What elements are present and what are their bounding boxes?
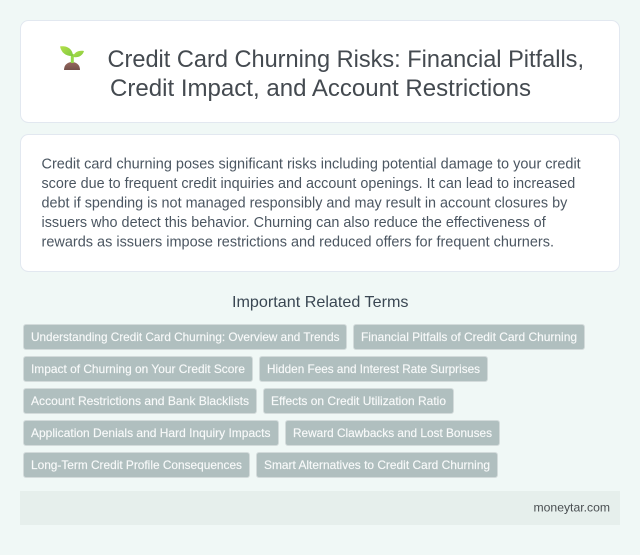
tag: financial pitfalls: Financial Pitfalls of Credit Card Churning <box>361 330 577 344</box>
tag: utilization: Effects on Credit Utilization Ratio <box>271 394 446 408</box>
description text: Credit card churning poses significant risks including potential damage to your credit <box>42 156 581 172</box>
tag: restrictions: Account Restrictions and Bank Blacklists <box>31 394 249 408</box>
tag list <box>24 324 584 478</box>
tag: financial pitfalls <box>354 324 584 350</box>
title: Credit Impact, and Account Restrictions <box>110 76 531 102</box>
footer source: moneytar.com <box>534 501 610 515</box>
title: Credit Card Churning Risks: Financial Pitfalls, <box>108 47 584 73</box>
tag: credit score: Impact of Churning on Your Credit Score <box>31 362 245 376</box>
tag: restrictions <box>24 388 256 414</box>
tag: long-term: Long-Term Credit Profile Consequences <box>31 458 242 472</box>
title <box>108 47 584 102</box>
tag: denials: Application Denials and Hard Inquiry Impacts <box>31 426 270 440</box>
footer <box>20 491 620 525</box>
tag: long-term <box>24 452 250 478</box>
description text: rewards as issuers impose restrictions and reduced offers for frequent churners. <box>42 234 554 250</box>
tag: clawbacks: Reward Clawbacks and Lost Bonuses <box>293 426 492 440</box>
tag: alternatives: Smart Alternatives to Credit Card Churning <box>264 458 490 472</box>
tag: overview <box>24 324 346 350</box>
tag: overview: Understanding Credit Card Churning: Overview and Trends <box>31 330 340 344</box>
tag: hidden fees: Hidden Fees and Interest Rate Surprises <box>267 362 480 376</box>
description text: debt if spending is not managed responsibly and may result in account closures by <box>42 195 568 211</box>
tag: hidden fees <box>260 356 488 382</box>
tag: credit score <box>24 356 252 382</box>
tag: alternatives <box>256 452 498 478</box>
tag: denials <box>24 420 278 446</box>
description text <box>42 156 581 250</box>
icon: sprout <box>60 46 84 70</box>
heading: important related terms: Important Related Terms <box>232 294 408 311</box>
description text: score due to frequent credit inquiries and account openings. It can lead to increased <box>42 176 575 192</box>
tag: clawbacks <box>286 420 500 446</box>
description text: issuers who detect this behavior. Churning can also reduce the effectiveness of <box>42 215 547 231</box>
panel: title card <box>20 20 620 122</box>
tag: utilization <box>264 388 454 414</box>
panel: description <box>20 134 620 272</box>
